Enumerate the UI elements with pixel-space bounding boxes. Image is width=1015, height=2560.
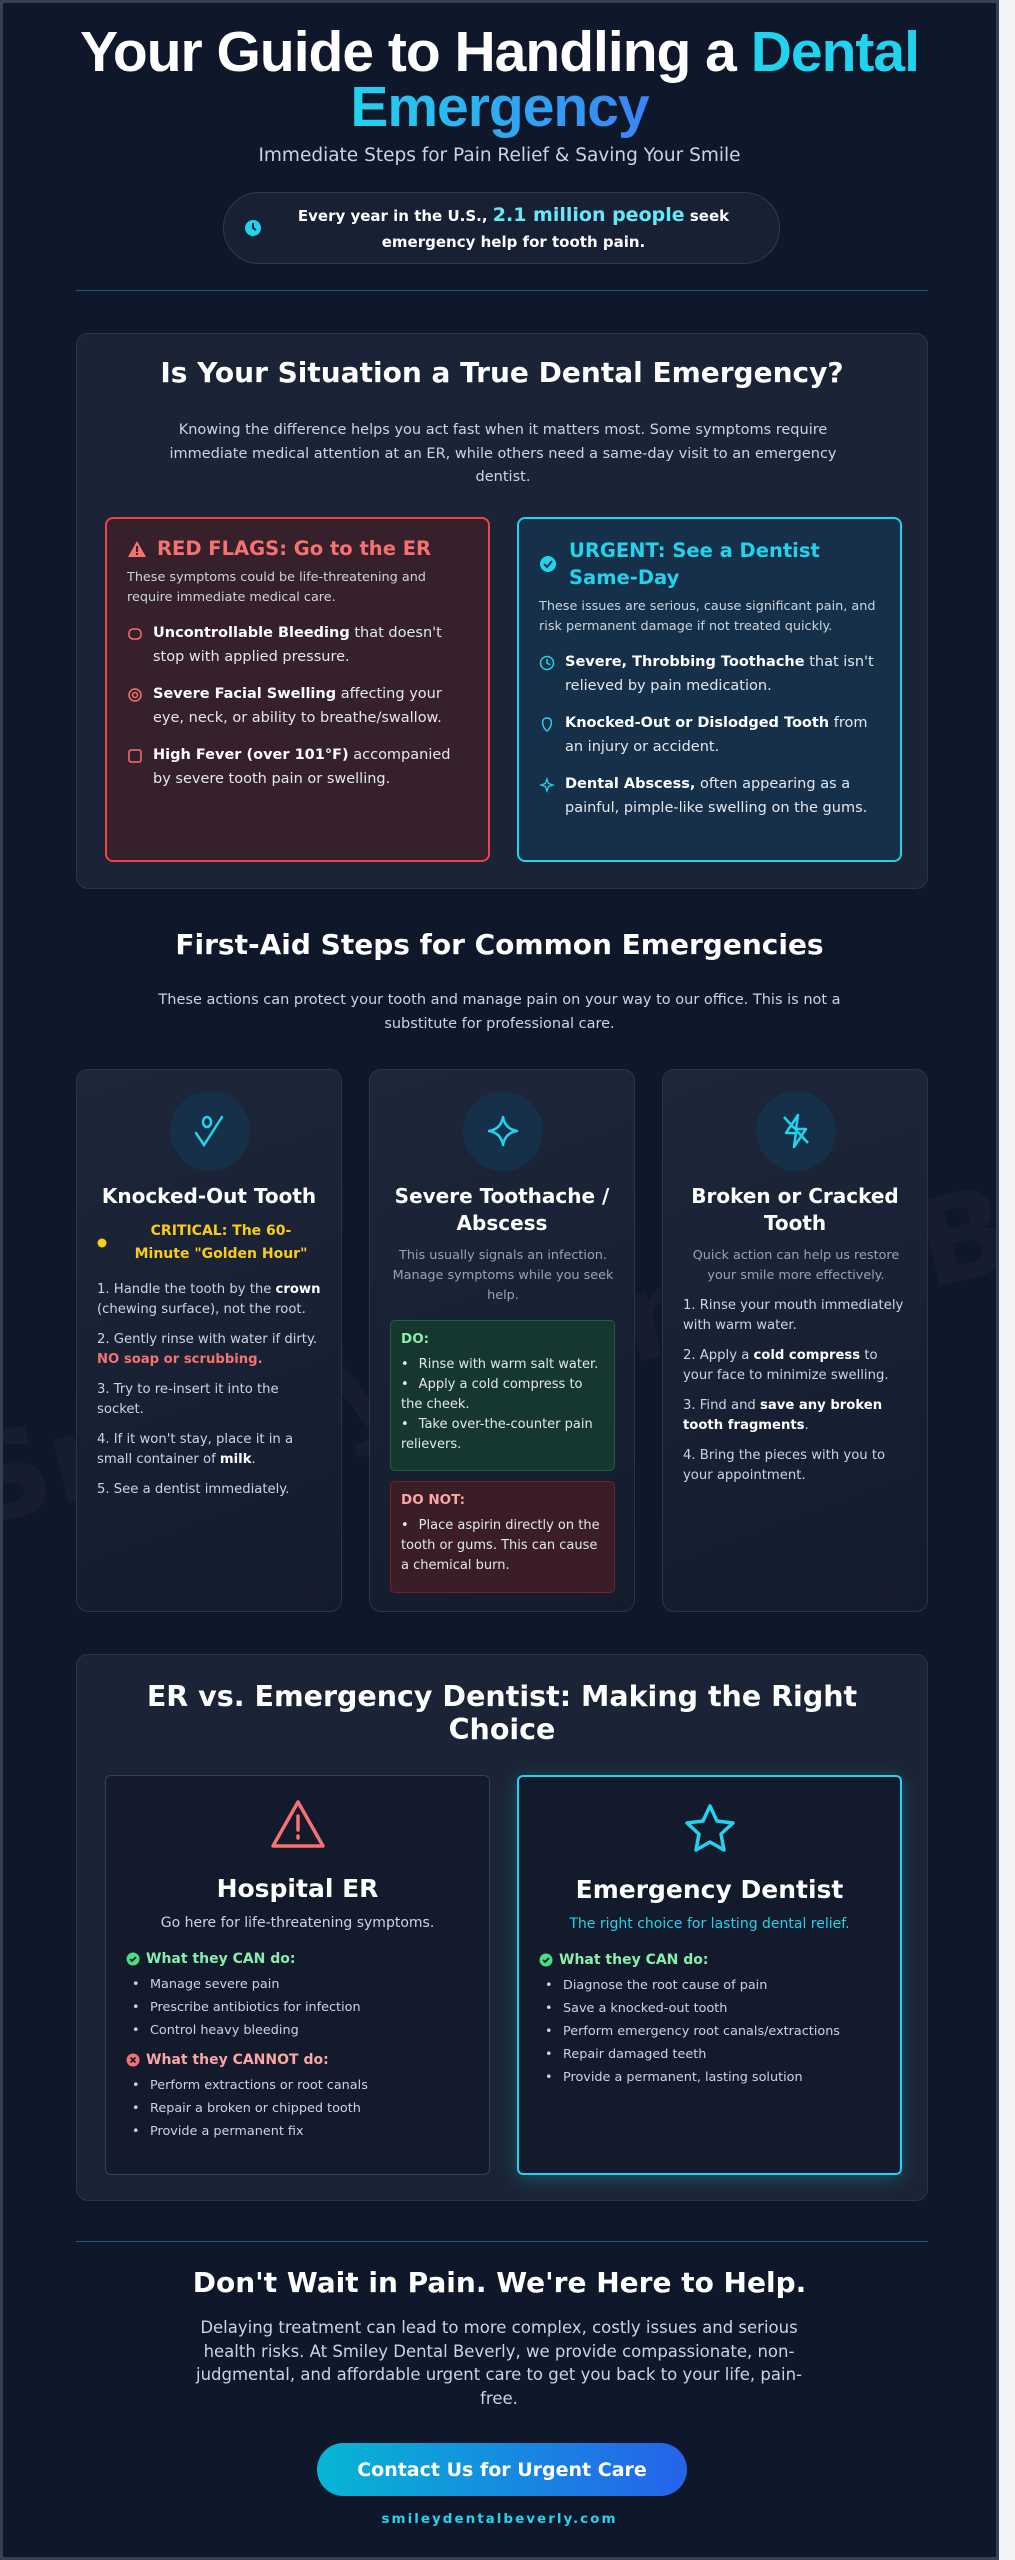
- card: urgent: Knocked-Out or Dislodged Tooth from an injury or accident.: [565, 715, 867, 754]
- icon: warning: [271, 1800, 325, 1848]
- icon: tooth check: [170, 1091, 250, 1171]
- card: red flags: Severe Facial Swelling affecting your eye, neck, or ability to breathe/swallow.: [153, 686, 442, 726]
- button: [317, 2443, 687, 2496]
- card: hospital ER: [105, 1775, 490, 2175]
- stat pill: emergency help for tooth pain.: [382, 232, 645, 250]
- card: toothache: This usually signals an infection. Manage symptoms while you seek help.: [393, 1248, 613, 1303]
- card: emergency dentist: Perform emergency root canals/extractions: [563, 2024, 840, 2039]
- do not box: Place aspirin directly on the tooth or gums. This can cause a chemical burn.: [401, 1518, 600, 1573]
- critical callout: Minute "Golden Hour": [135, 1246, 307, 1262]
- icon: sparkle: [463, 1091, 543, 1171]
- steps: [683, 1298, 903, 1483]
- panel: ER vs dentist: [76, 1654, 928, 2201]
- urgent heading: Same-Day: [569, 566, 679, 589]
- CTA text: Delaying treatment can lead to more complex, costly issues and serious health risks. At Smiley Dental Beverly, we provide compassionate, non-judgmental, and affordable urgent care to get you back to your life, pain-free.: [196, 2318, 802, 2408]
- card: emergency dentist: The right choice for lasting dental relief.: [569, 1916, 850, 1932]
- card: emergency dentist: [517, 1775, 902, 2175]
- card: toothache: Abscess: [457, 1211, 547, 1235]
- urgent heading: [540, 539, 820, 589]
- critical callout: [98, 1223, 307, 1262]
- steps: 5. See a dentist immediately.: [97, 1482, 289, 1497]
- card: urgent: [517, 517, 902, 862]
- panel: true emergency: [76, 333, 928, 889]
- card: broken tooth: Tooth: [764, 1211, 826, 1235]
- button: Contact Us for Urgent Care: [357, 2458, 647, 2480]
- website url: smileydentalbeverly.com: [381, 2511, 618, 2527]
- card: knocked-out tooth: [76, 1069, 342, 1612]
- do box: Rinse with warm salt water.: [419, 1357, 598, 1372]
- card: red flags: Uncontrollable Bleeding that doesn't stop with applied pressure.: [153, 625, 442, 664]
- card: broken tooth: Broken or Cracked: [691, 1184, 899, 1208]
- steps: 1. Handle the tooth by the crown (chewing surface), not the root.: [97, 1282, 320, 1317]
- CTA heading: Don't Wait in Pain. We're Here to Help.: [193, 2266, 806, 2299]
- card: hospital ER: What they CANNOT do:: [146, 2052, 329, 2068]
- do box: [390, 1320, 615, 1471]
- card: broken tooth: [662, 1069, 928, 1612]
- do not box: [390, 1481, 615, 1593]
- stat pill: Every year in the U.S., 2.1 million people seek: [298, 204, 729, 226]
- steps: 3. Find and save any broken tooth fragments.: [683, 1398, 882, 1433]
- card: urgent: Severe, Throbbing Toothache that isn't relieved by pain medication.: [565, 654, 874, 694]
- first aid intro: These actions can protect your tooth and manage pain on your way to our office. This is not a substitute for professional care.: [158, 992, 841, 1032]
- title: Your Guide to Handling a Dental: [80, 20, 919, 84]
- card: toothache: Severe Toothache /: [395, 1184, 609, 1208]
- card: red flags: High Fever (over 101°F) accompanied by severe tooth pain or swelling.: [153, 747, 450, 786]
- card: hospital ER: Manage severe pain: [150, 1977, 279, 1992]
- critical callout: CRITICAL: The 60-: [151, 1223, 291, 1239]
- do box: Take over-the-counter pain relievers.: [401, 1417, 593, 1452]
- steps: 1. Rinse your mouth immediately with warm water.: [683, 1298, 903, 1333]
- title: [80, 20, 919, 139]
- card: urgent: These issues are serious, cause significant pain, and risk permanent damage if not treated quickly.: [539, 599, 875, 634]
- intro text: Knowing the difference helps you act fast when it matters most. Some symptoms require immediate medical attention at an ER, while others need a same-day visit to an emergency dentist.: [169, 422, 837, 485]
- card: red flags: [105, 517, 490, 862]
- card: broken tooth: Quick action can help us restore your smile more effectively.: [693, 1248, 899, 1283]
- card: toothache: [369, 1069, 635, 1612]
- card: emergency dentist: Diagnose the root cause of pain: [563, 1978, 767, 1993]
- card: hospital ER: What they CAN do:: [146, 1951, 296, 1967]
- card: hospital ER: Perform extractions or root canals: [150, 2078, 368, 2093]
- icon: broken bolt: [756, 1091, 836, 1171]
- red flag heading: RED FLAGS: Go to the ER: [157, 537, 431, 560]
- heading: [147, 1680, 857, 1746]
- steps: 3. Try to re-insert it into the socket.: [97, 1382, 279, 1417]
- icon: star: [685, 1804, 735, 1852]
- steps: 4. If it won't stay, place it in a small container of milk.: [97, 1432, 293, 1467]
- heading: Is Your Situation a True Dental Emergency?: [160, 356, 844, 389]
- card: red flags: These symptoms could be life-threatening and require immediate medical care.: [127, 570, 426, 605]
- steps: [97, 1282, 320, 1497]
- card: hospital ER: Repair a broken or chipped tooth: [150, 2101, 361, 2116]
- card: emergency dentist: Repair damaged teeth: [563, 2047, 706, 2062]
- card: emergency dentist: Provide a permanent, lasting solution: [563, 2070, 803, 2085]
- do not box: DO NOT:: [401, 1492, 465, 1508]
- card: hospital ER: Go here for life-threatening symptoms.: [161, 1915, 434, 1931]
- steps: 2. Apply a cold compress to your face to minimize swelling.: [683, 1348, 889, 1383]
- steps: 4. Bring the pieces with you to your appointment.: [683, 1448, 885, 1483]
- stat pill: [223, 192, 780, 264]
- card: hospital ER: Hospital ER: [217, 1874, 378, 1903]
- do box: Apply a cold compress to the cheek.: [401, 1377, 583, 1412]
- card: emergency dentist: Emergency Dentist: [576, 1875, 843, 1904]
- card: hospital ER: Provide a permanent fix: [150, 2124, 304, 2139]
- card: hospital ER: Prescribe antibiotics for infection: [150, 2000, 361, 2015]
- steps: 2. Gently rinse with water if dirty. NO soap or scrubbing.: [97, 1332, 317, 1367]
- heading: ER vs. Emergency Dentist: Making the Right: [147, 1680, 857, 1713]
- card: urgent: Dental Abscess, often appearing as a painful, pimple-like swelling on the gums.: [565, 776, 867, 816]
- heading: first aid: First-Aid Steps for Common Emergencies: [175, 928, 824, 961]
- icon: clock: [245, 220, 261, 236]
- heading: Choice: [449, 1713, 555, 1746]
- card: emergency dentist: Save a knocked-out tooth: [563, 2001, 727, 2016]
- card: emergency dentist: What they CAN do:: [559, 1952, 709, 1968]
- subtitle: Immediate Steps for Pain Relief & Saving Your Smile: [258, 145, 741, 166]
- card: hospital ER: Control heavy bleeding: [150, 2023, 299, 2038]
- card: knocked-out tooth: Knocked-Out Tooth: [102, 1184, 316, 1208]
- urgent heading: URGENT: See a Dentist: [569, 539, 820, 562]
- do box: DO:: [401, 1331, 429, 1347]
- title: Emergency: [350, 75, 649, 139]
